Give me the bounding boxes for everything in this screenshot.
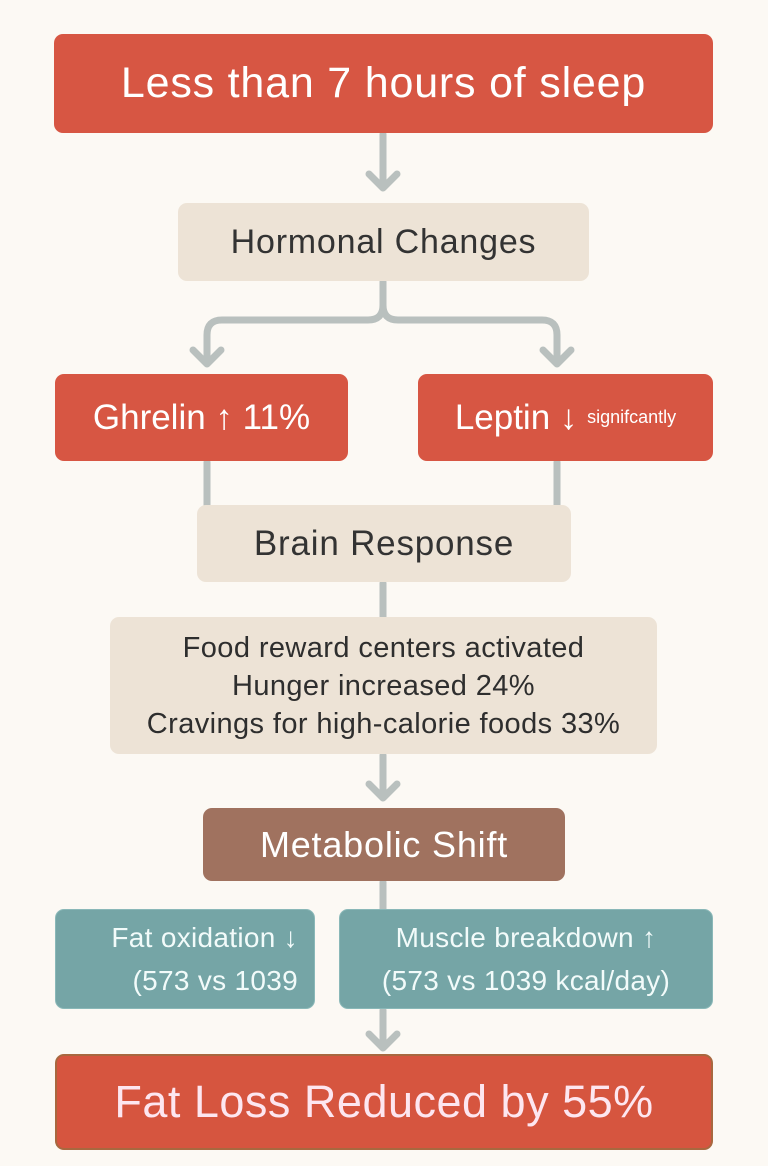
box: Leptin bbox=[418, 374, 713, 461]
box: Leptin: signifcantly bbox=[587, 407, 676, 427]
box: Fat oxidation: Fat oxidation ↓ bbox=[111, 922, 298, 953]
box: Brain Response bbox=[197, 505, 571, 582]
box: Leptin: Leptin ↓ bbox=[455, 398, 577, 436]
title: Less than 7 hours of sleep: Less than 7 hours of sleep bbox=[121, 59, 646, 107]
text block: brain effects: Cravings for high-calorie foods 33% bbox=[147, 708, 620, 740]
text block: brain effects: Hunger increased 24% bbox=[232, 670, 535, 702]
box: Fat oxidation: (573 vs 1039 bbox=[132, 965, 298, 996]
box: Ghrelin bbox=[55, 374, 348, 461]
box: Brain Response: Brain Response bbox=[254, 524, 514, 562]
box: Muscle breakdown bbox=[339, 909, 713, 1009]
box: Muscle breakdown: Muscle breakdown ↑ bbox=[396, 922, 656, 953]
box: Fat oxidation bbox=[55, 909, 315, 1009]
box: Metabolic Shift bbox=[203, 808, 565, 881]
box: Ghrelin: Ghrelin ↑ 11% bbox=[93, 398, 310, 436]
box: Hormonal Changes: Hormonal Changes bbox=[231, 222, 536, 260]
result: Fat Loss Reduced by 55%: Fat Loss Reduced by 55% bbox=[114, 1076, 654, 1127]
title: Less than 7 hours of sleep bbox=[54, 34, 713, 133]
text block: brain effects: Food reward centers activated bbox=[183, 632, 584, 664]
box: Hormonal Changes bbox=[178, 203, 589, 281]
box: Muscle breakdown: (573 vs 1039 kcal/day) bbox=[382, 965, 670, 996]
box: Metabolic Shift: Metabolic Shift bbox=[260, 824, 508, 864]
text block: brain effects bbox=[110, 617, 657, 754]
result: Fat Loss Reduced by 55% bbox=[55, 1054, 713, 1150]
